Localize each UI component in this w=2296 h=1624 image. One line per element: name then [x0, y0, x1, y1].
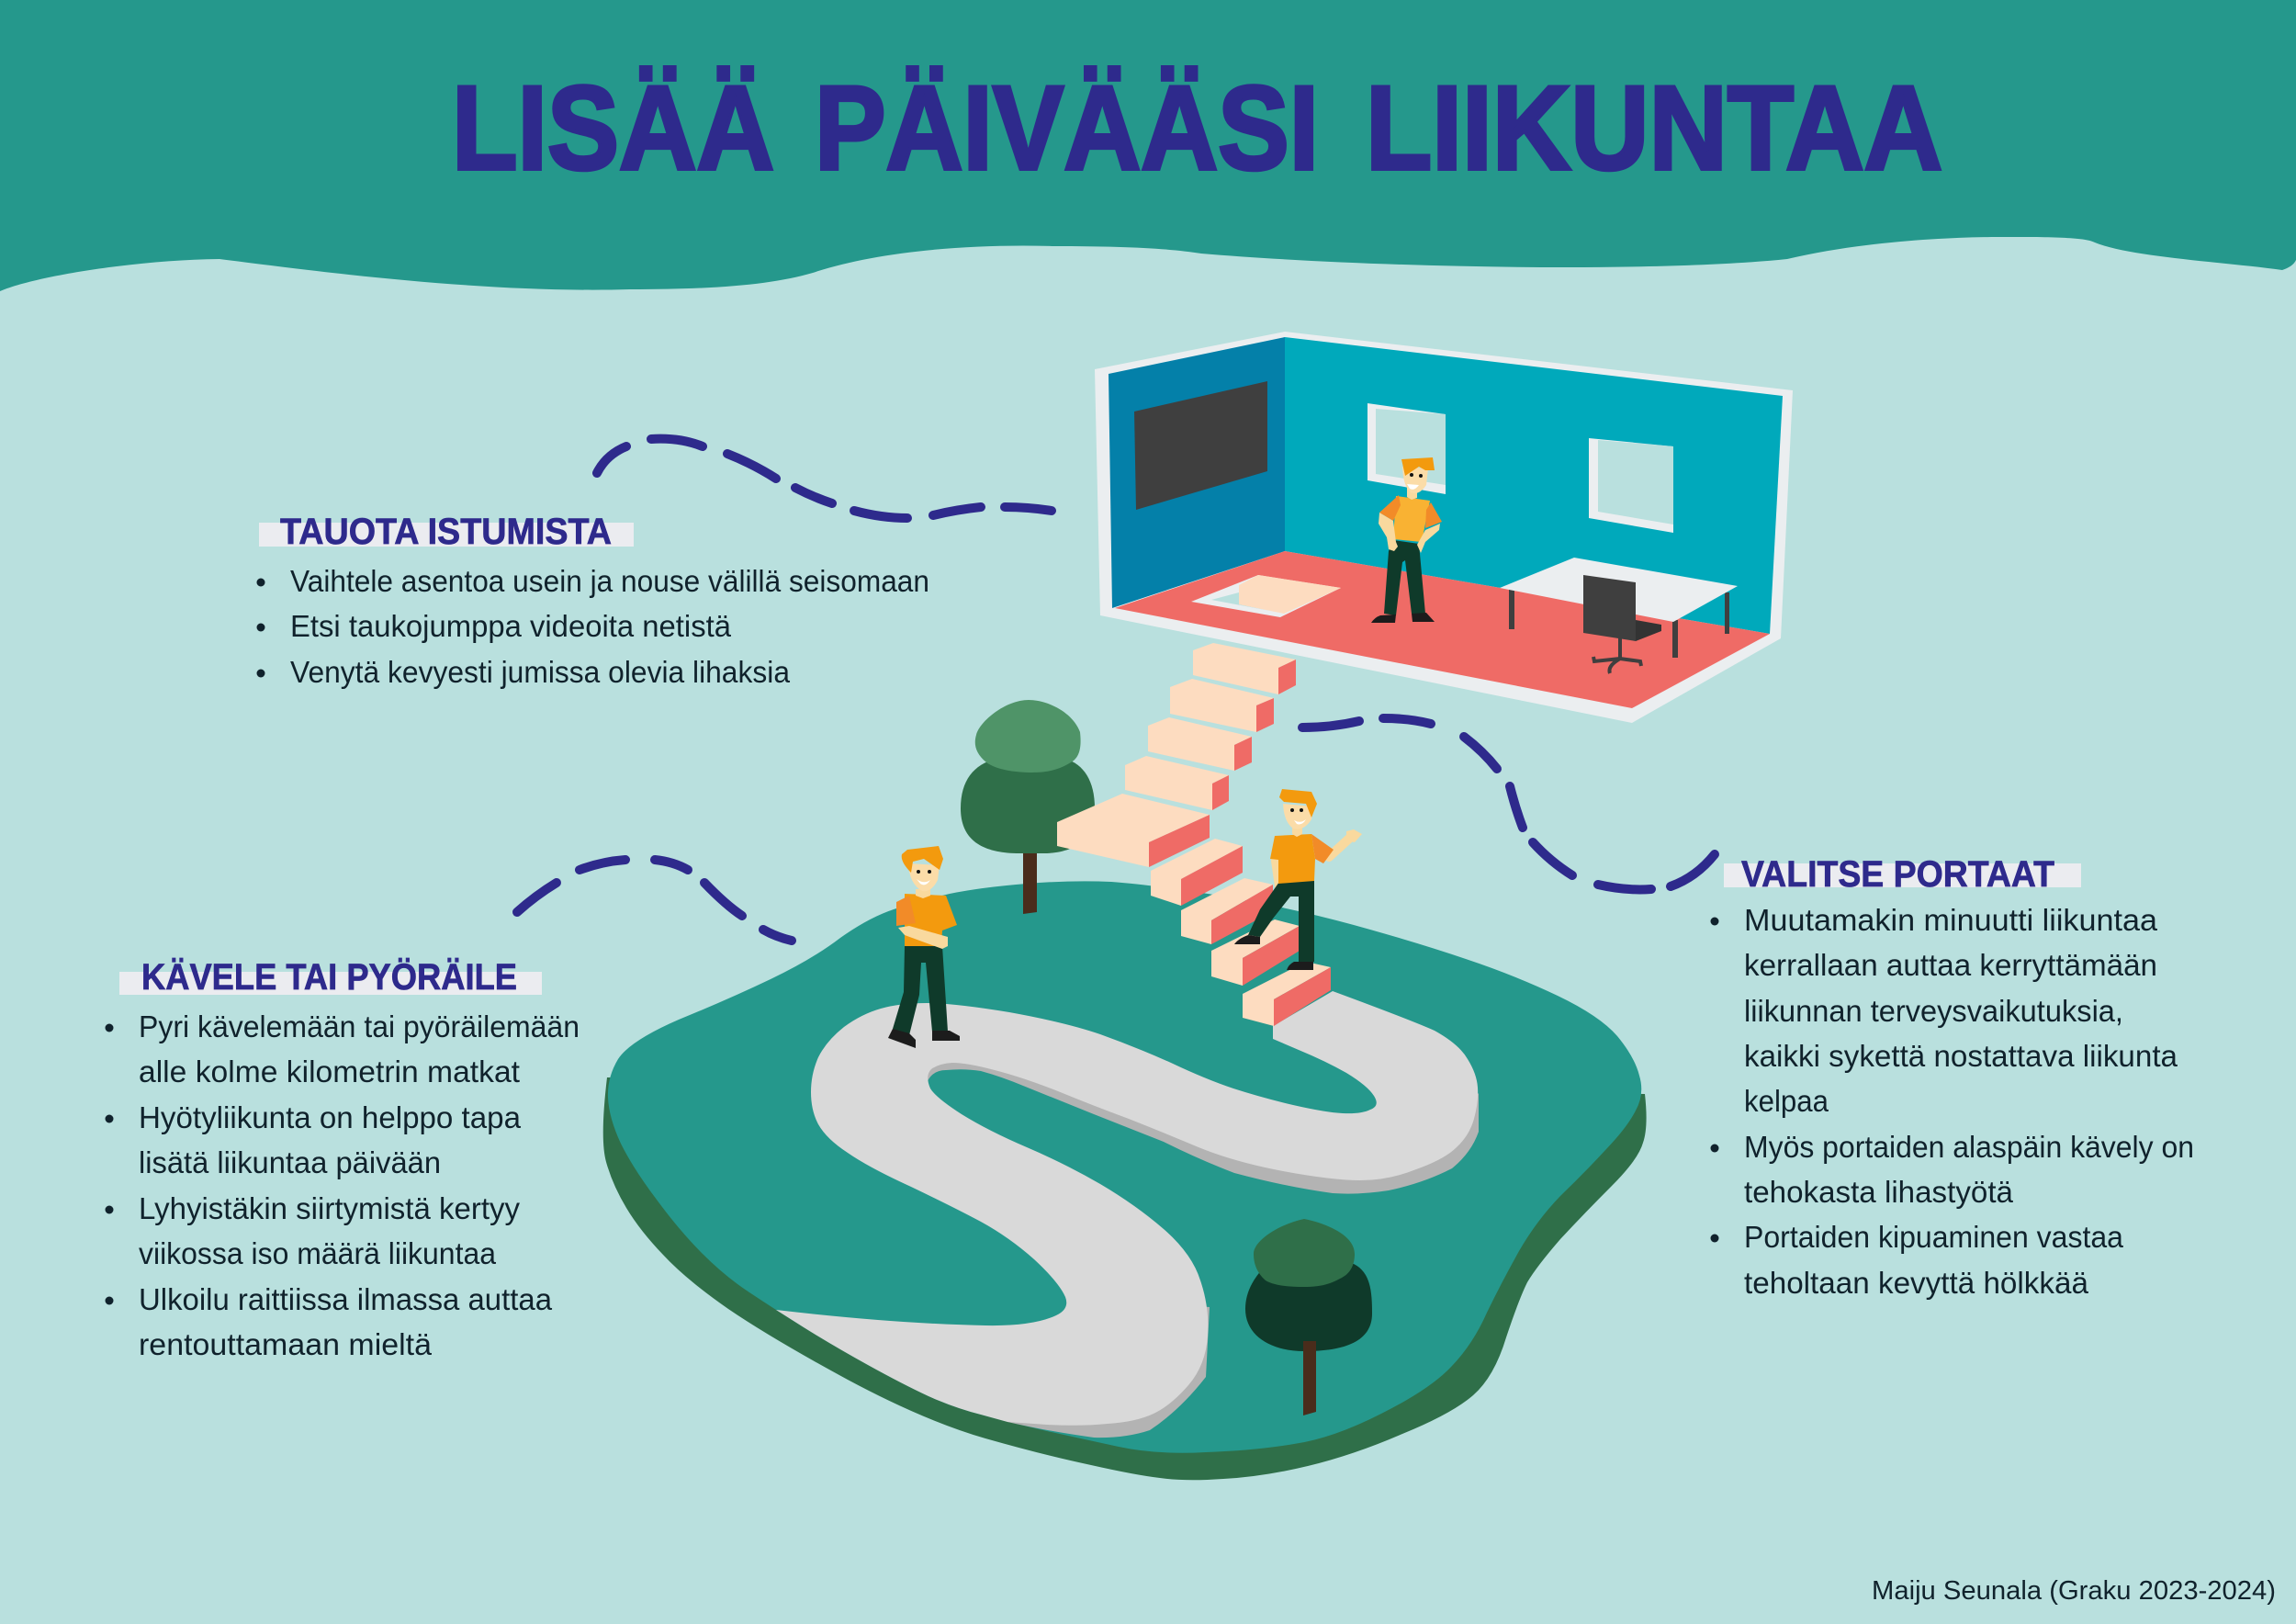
header band — [0, 0, 2296, 291]
bullet list: tauota istumista — [257, 564, 929, 689]
person on stairs — [1234, 789, 1362, 970]
bullet list: valitse portaat: Portaiden kipuaminen vastaa — [1744, 1220, 2124, 1254]
step 4 — [1125, 756, 1229, 810]
bullet list: kävele tai pyöräile: Pyri kävelemään tai pyöräilemään — [139, 1009, 580, 1043]
back wall — [1285, 337, 1783, 634]
bullet list: kävele tai pyöräile: Ulkoilu raittiissa ilmassa auttaa — [139, 1282, 553, 1316]
room — [1095, 332, 1793, 723]
bullet list: tauota istumista: Vaihtele asentoa usein ja nouse välillä seisomaan — [290, 564, 929, 598]
bullet list: valitse portaat: liikunnan terveysvaikutuksia, — [1744, 994, 2123, 1028]
left wall — [1109, 337, 1285, 608]
bullet list: kävele tai pyöräile: lisätä liikuntaa päivään — [139, 1145, 441, 1179]
step 6 — [1151, 839, 1243, 906]
step 2 — [1170, 679, 1274, 732]
bullet list: valitse portaat: Muutamakin minuutti liikuntaa — [1744, 903, 2158, 937]
credit: Maiju Seunala (Graku 2023-2024) — [1872, 1576, 2276, 1606]
title: PÄIVÄÄSI — [815, 61, 1319, 195]
panel: valitse portaat — [1710, 854, 2194, 1300]
bullet list: valitse portaat: Myös portaiden alaspäin kävely on — [1744, 1130, 2194, 1164]
person standing in room — [1371, 457, 1442, 623]
bullet list: valitse portaat: kerrallaan auttaa kerryttämään — [1744, 948, 2157, 982]
bullet list: kävele tai pyöräile: Hyötyliikunta on helppo tapa — [139, 1100, 522, 1134]
bullet list: tauota istumista: Venytä kevyesti jumissa olevia lihaksia — [290, 655, 791, 689]
step 7 — [1181, 878, 1273, 944]
bullet list: kävele tai pyöräile: viikossa iso määrä liikuntaa — [139, 1236, 497, 1270]
desk — [1500, 558, 1738, 658]
heading: valitse portaat: VALITSE PORTAAT — [1741, 854, 2054, 895]
office chair — [1583, 575, 1661, 673]
heading: kävele tai pyöräile: KÄVELE TAI PYÖRÄILE — [141, 956, 517, 998]
title: LISÄÄ — [452, 61, 774, 195]
window 1 — [1367, 403, 1446, 494]
tree: upper — [961, 700, 1095, 914]
tree: lower — [1245, 1219, 1372, 1415]
bullet list: valitse portaat: tehokasta lihastyötä — [1744, 1175, 2014, 1209]
road shadow upper — [918, 1047, 1479, 1194]
step 3 — [1148, 717, 1252, 771]
title: LIIKUNTAA — [1366, 61, 1942, 195]
panel: tauota istumista — [257, 512, 929, 689]
step 1 — [1193, 643, 1296, 694]
bullet list: valitse portaat: kelpaa — [1744, 1084, 1829, 1118]
bullet list: valitse portaat — [1710, 903, 2194, 1300]
dashed arrow: right — [1302, 718, 1715, 889]
room frame — [1095, 332, 1793, 723]
floor opening — [1191, 575, 1341, 617]
step 5 landing — [1057, 794, 1210, 867]
island top — [608, 881, 1641, 1453]
step 8 — [1211, 919, 1300, 986]
window 2 — [1589, 438, 1673, 533]
wall screen — [1134, 381, 1267, 510]
bullet list: kävele tai pyöräile — [105, 1009, 580, 1361]
bullet list: tauota istumista: Etsi taukojumppa videoita netistä — [290, 609, 732, 643]
panel: kävele tai pyöräile — [105, 956, 580, 1361]
bullet list: kävele tai pyöräile: Lyhyistäkin siirtymistä kertyy — [139, 1191, 520, 1225]
island side — [603, 1077, 1647, 1480]
heading: tauota istumista: TAUOTA ISTUMISTA — [280, 512, 612, 552]
road shadow lower — [1007, 1304, 1210, 1438]
stairs — [1057, 643, 1331, 1026]
bullet list: kävele tai pyöräile: rentouttamaan mieltä — [139, 1327, 433, 1361]
bullet list: valitse portaat: kaikki sykettä nostattava liikunta — [1744, 1039, 2178, 1073]
bullet list: kävele tai pyöräile: alle kolme kilometrin matkat — [139, 1054, 520, 1088]
dashed arrow: left — [517, 860, 792, 941]
step 9 — [1243, 962, 1331, 1026]
bullet list: valitse portaat: teholtaan kevyttä hölkkää — [1744, 1266, 2089, 1300]
floor — [1115, 551, 1770, 708]
dashed arrow: top — [597, 439, 1052, 518]
island — [603, 881, 1647, 1480]
person on road — [888, 846, 960, 1048]
road — [776, 991, 1478, 1426]
title — [452, 61, 1942, 195]
